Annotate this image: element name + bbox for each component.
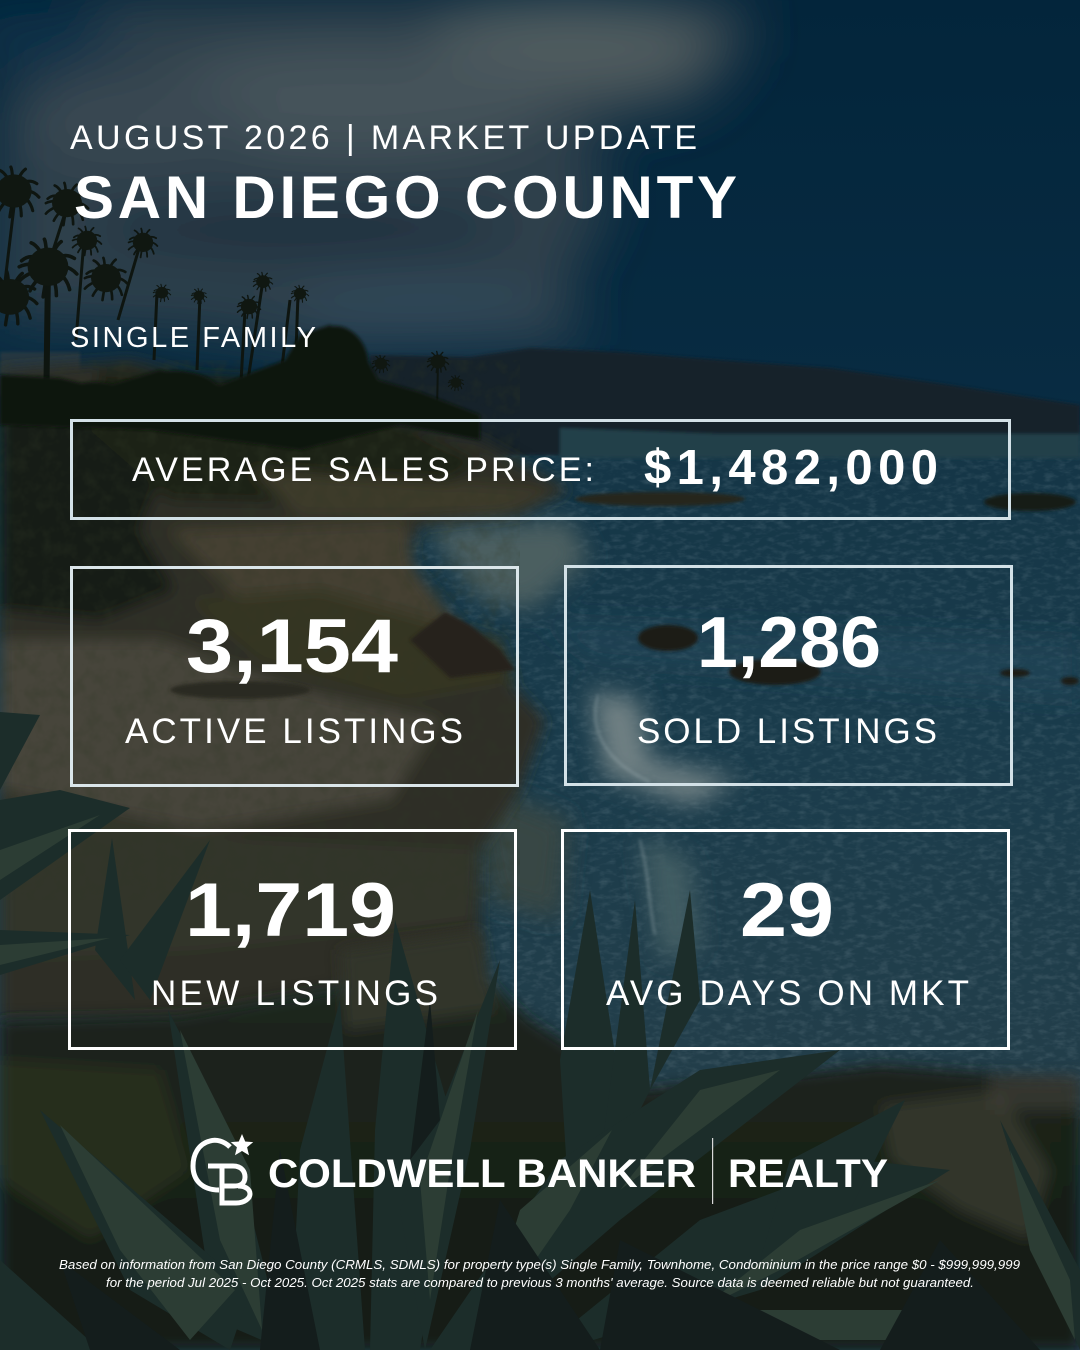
ocean — [0, 425, 1080, 1165]
active listings label: ACTIVE LISTINGS — [125, 712, 463, 751]
footnote disclaimer — [59, 1258, 1020, 1290]
average sales price label: AVERAGE SALES PRICE: — [132, 451, 594, 489]
panel: sold listings — [566, 566, 1012, 784]
new listings value: 1,719 — [185, 868, 396, 953]
panel: average sales price — [72, 420, 1010, 518]
sold listings label: SOLD LISTINGS — [637, 712, 937, 751]
palm trees — [0, 167, 464, 420]
sold listings value: 1,286 — [697, 603, 881, 683]
panel: average days on market — [562, 830, 1008, 1048]
average sales price value: $1,482,000 — [644, 441, 938, 495]
panel: active listings — [72, 568, 518, 786]
tree mass — [0, 325, 480, 450]
footnote disclaimer: Based on information from San Diego County (CRMLS, SDMLS) for property type(s) Single Family, Townhome, Condominium in the price range $0 - $999,999,999 — [59, 1258, 1020, 1272]
cliff and beach — [0, 360, 570, 1020]
distant hills — [0, 348, 1080, 458]
footnote disclaimer: for the period Jul 2025 - Oct 2025. Oct 2025 stats are compared to previous 3 months' average. Source data is deemed reliable but not guaranteed. — [106, 1276, 974, 1290]
panel: new listings — [70, 830, 516, 1048]
logo wordmark: Realty: REALTY — [728, 1152, 888, 1196]
foreground vegetation — [0, 930, 1080, 1350]
average days label: AVG DAYS ON MKT — [606, 974, 969, 1013]
clouds — [0, 0, 750, 350]
logo: Coldwell Banker Realty — [193, 1134, 888, 1204]
title: SAN DIEGO COUNTY — [74, 164, 737, 231]
property type label: SINGLE FAMILY — [70, 322, 316, 354]
logo wordmark: Coldwell Banker: COLDWELL BANKER — [268, 1152, 696, 1196]
icon: CB monogram with star — [193, 1134, 253, 1203]
eyebrow: date and market update: AUGUST 2026 | MARKET UPDATE — [70, 119, 697, 157]
active listings value: 3,154 — [186, 604, 398, 689]
agave leaves — [0, 712, 1080, 1350]
average days value: 29 — [740, 868, 834, 953]
new listings label: NEW LISTINGS — [151, 974, 438, 1013]
logo divider — [712, 1138, 713, 1204]
rocks — [170, 492, 1079, 699]
